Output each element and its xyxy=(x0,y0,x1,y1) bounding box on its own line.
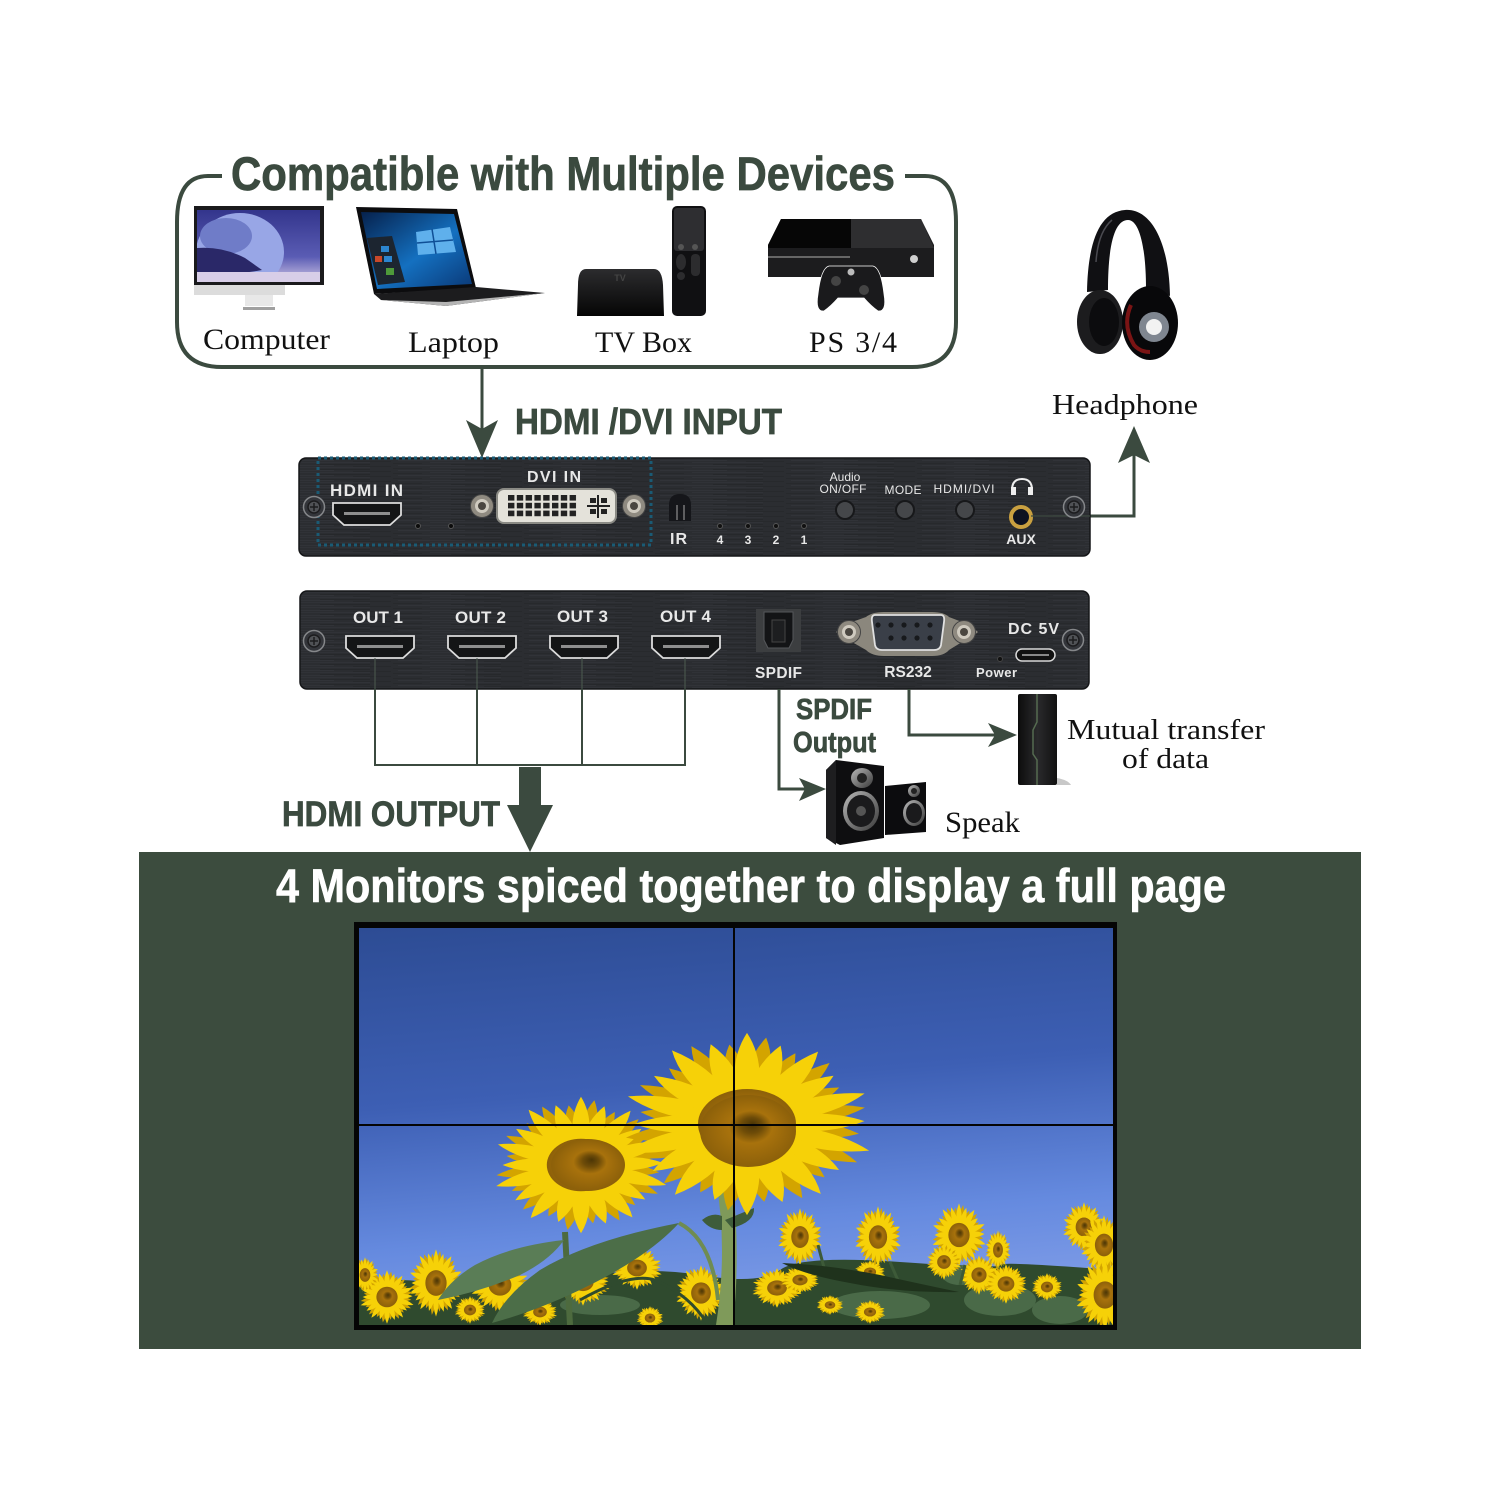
led indicators xyxy=(717,524,808,547)
bezel seams xyxy=(359,928,1113,1325)
screw xyxy=(1062,630,1084,650)
led indicators: 2 xyxy=(773,533,780,547)
leds xyxy=(416,524,454,528)
heading: hdmi output: HDMI OUTPUT xyxy=(282,795,500,834)
foliage xyxy=(359,1260,1113,1325)
port: out 2 xyxy=(448,636,516,658)
label: mutual transfer of data: Mutual transfer xyxy=(1067,714,1265,746)
screen frame xyxy=(354,922,1117,1330)
led indicators: 4 xyxy=(717,533,724,547)
led indicators: 1 xyxy=(801,533,808,547)
heading: hdmi dvi input: HDMI /DVI INPUT xyxy=(515,401,782,442)
label: computer: Computer xyxy=(203,323,330,356)
label: mutual transfer of data: of data xyxy=(1122,743,1209,775)
port: out 1 xyxy=(346,636,414,658)
screw xyxy=(304,496,324,518)
buttons xyxy=(836,501,974,519)
port: hdmi in xyxy=(333,503,401,525)
sunflower: left xyxy=(496,1096,666,1234)
screw xyxy=(1064,496,1084,518)
panel: compatible devices xyxy=(177,147,956,367)
label: out 2: OUT 2 xyxy=(455,608,506,627)
stems xyxy=(716,1178,737,1325)
arrow: hdmi output xyxy=(507,767,553,852)
label: out 3: OUT 3 xyxy=(557,607,608,626)
panel: front of device xyxy=(299,458,1090,556)
port: rs232 xyxy=(836,612,978,656)
sunflower: centre xyxy=(626,1033,869,1215)
device body xyxy=(300,591,1089,689)
label: mode: MODE xyxy=(884,483,922,497)
icon: game console xyxy=(768,219,934,277)
label: laptop: Laptop xyxy=(408,326,499,359)
port: dvi in xyxy=(470,489,646,523)
icon: laptop xyxy=(356,207,545,306)
label: spdif: SPDIF xyxy=(755,665,802,682)
tv logo: TV xyxy=(614,273,626,283)
heading: spdif output: SPDIF xyxy=(796,694,872,726)
port: aux jack xyxy=(1011,507,1090,527)
heading: spdif output xyxy=(793,694,876,759)
arrow: spdif to speakers xyxy=(779,689,826,801)
label: audio on/off: Audio xyxy=(830,470,861,484)
label: aux: AUX xyxy=(1006,531,1036,547)
ir sensor xyxy=(669,494,691,521)
image: sunflower field xyxy=(350,928,1137,1334)
label: dvi in: DVI IN xyxy=(527,469,581,486)
input highlight xyxy=(318,458,651,545)
label: mutual transfer of data xyxy=(1067,714,1265,775)
icon: computer xyxy=(194,206,324,310)
title: compatible devices: Compatible with Multiple Devices xyxy=(231,147,895,200)
icon: headphones xyxy=(1077,210,1178,360)
heading: spdif output: Output xyxy=(793,727,876,759)
sky xyxy=(359,928,1113,1283)
label: hdmi in: HDMI IN xyxy=(330,481,403,500)
label: ps 3/4: PS 3/4 xyxy=(809,326,897,359)
port: usb-c xyxy=(1016,649,1055,661)
icon: small headphones xyxy=(1012,479,1032,494)
icon: remote xyxy=(672,206,706,316)
power led xyxy=(998,656,1002,662)
wires through device xyxy=(375,658,685,689)
label: ir: IR xyxy=(670,531,687,548)
small flowers xyxy=(350,1200,1137,1334)
port: out 4 xyxy=(652,636,720,658)
label: hdmi/dvi: HDMI/DVI xyxy=(934,482,994,496)
port: out 3 xyxy=(550,636,618,658)
label: headphone: Headphone xyxy=(1052,389,1198,421)
label: dc 5v: DC 5V xyxy=(1008,621,1059,638)
title: video wall: 4 Monitors spiced together to display a full page xyxy=(276,859,1226,912)
label: audio on/off: ON/OFF xyxy=(820,482,866,496)
panel outline xyxy=(177,176,956,367)
icon: tv box xyxy=(577,269,664,316)
panel: rear of device xyxy=(300,591,1089,689)
icon: speakers xyxy=(826,760,926,845)
arrow: rs232 to pc xyxy=(909,689,1017,747)
panel background xyxy=(139,852,1361,1349)
label: out 1: OUT 1 xyxy=(353,608,403,627)
led indicators: 3 xyxy=(745,533,752,547)
label: rs232: RS232 xyxy=(884,664,932,681)
port: spdif xyxy=(756,609,801,652)
panel: video wall xyxy=(139,852,1361,1349)
label: audio on/off xyxy=(820,470,866,496)
label: speak: Speak xyxy=(945,806,1020,839)
arrow: devices to input xyxy=(466,367,498,458)
leaves xyxy=(492,1223,679,1323)
diagram: hdmi output wiring xyxy=(375,689,685,765)
screw xyxy=(304,630,324,652)
arrow: aux to headphone xyxy=(1090,426,1150,516)
device body xyxy=(299,458,1090,556)
icon: pc tower xyxy=(1018,694,1071,785)
label: tv box: TV Box xyxy=(595,326,692,359)
icon: game controller xyxy=(817,266,885,311)
label: out 4: OUT 4 xyxy=(660,607,712,626)
label: power: Power xyxy=(976,665,1017,680)
